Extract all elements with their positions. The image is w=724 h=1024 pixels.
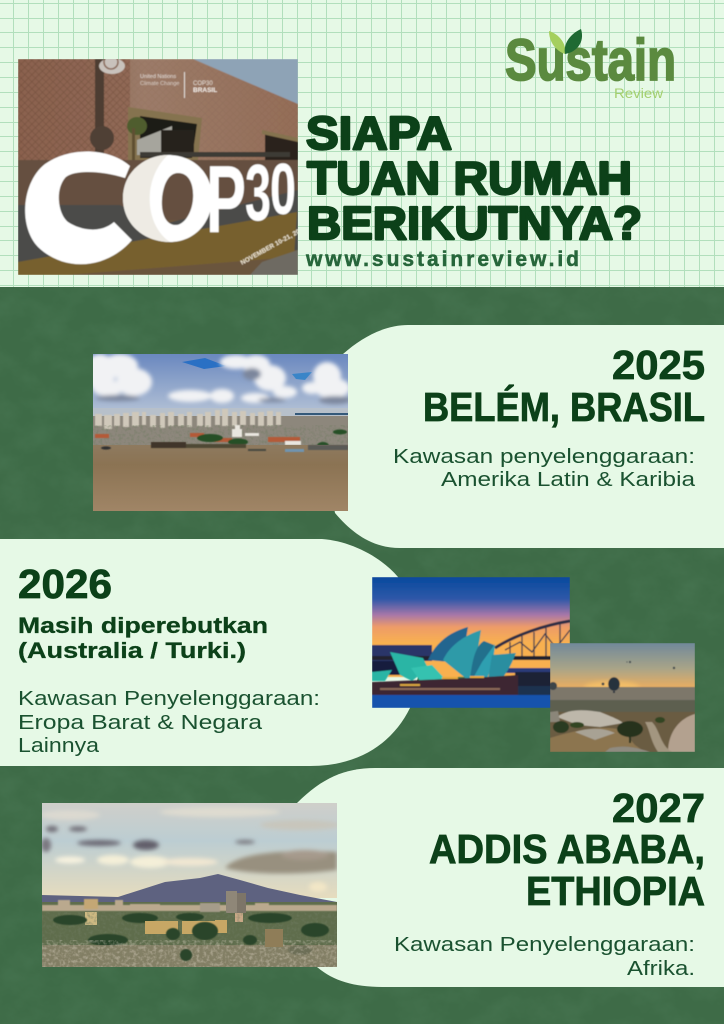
logo: Sustain Review: Review bbox=[614, 85, 664, 101]
text: 2026 region: Lainnya bbox=[18, 735, 100, 757]
photo: COP30 venue: United Nations bbox=[140, 74, 176, 80]
title: SIAPA bbox=[306, 107, 452, 159]
photo: Addis Ababa skyline bbox=[40, 803, 340, 967]
text: 2025 region: Amerika Latin & Karibia bbox=[441, 469, 696, 491]
panel: 2026 background bbox=[0, 539, 425, 766]
text: 2027 heading: ETHIOPIA bbox=[526, 868, 705, 914]
photo: Sydney Opera House bbox=[372, 577, 570, 708]
sculpture: P30: P bbox=[206, 146, 246, 253]
text: 2026 heading: 2026 bbox=[18, 561, 112, 607]
photo: COP30 venue: Climate Change bbox=[140, 81, 179, 87]
text: 2027 region: Kawasan Penyelenggaraan: bbox=[394, 934, 695, 956]
photo: COP30 venue: BRASIL bbox=[193, 87, 217, 94]
photo: COP30 venue: COP30 bbox=[193, 81, 213, 87]
title bbox=[306, 107, 642, 249]
logo: Sustain Review: Sustain bbox=[505, 28, 676, 93]
text: 2027 heading: ADDIS ABABA, bbox=[429, 826, 705, 872]
sculpture: P30 bbox=[209, 162, 295, 234]
sculpture: P30: 0 bbox=[270, 150, 296, 230]
text: 2027 heading: 2027 bbox=[612, 785, 705, 831]
text: 2025 region: Kawasan penyelenggaraan: bbox=[393, 446, 695, 468]
text: 2025 region bbox=[393, 446, 696, 491]
icon: logo leaves bbox=[549, 29, 582, 54]
title: BERIKUTNYA? bbox=[307, 197, 642, 249]
photo: COP30 venue: NOVEMBER 10-21, 2025 bbox=[240, 225, 308, 267]
text: 2026 region: Eropa Barat & Negara bbox=[18, 712, 263, 734]
sculpture: letter O bbox=[123, 155, 212, 242]
photo: COP30 venue bbox=[18, 55, 308, 275]
panel: 2027 background bbox=[270, 768, 724, 987]
photo: Cappadocia balloons bbox=[549, 643, 695, 752]
title: TUAN RUMAH bbox=[307, 152, 632, 204]
text: 2027 region: Afrika. bbox=[627, 958, 695, 980]
photo: Belem skyline bbox=[84, 354, 351, 511]
sculpture: P30: 3 bbox=[245, 148, 271, 237]
text: 2025 heading: 2025 bbox=[612, 342, 705, 388]
text: 2027 heading bbox=[429, 785, 705, 914]
website url: www.sustainreview.id bbox=[305, 248, 579, 271]
text: 2026 region: Kawasan Penyelenggaraan: bbox=[18, 688, 320, 710]
text: 2027 region bbox=[394, 934, 695, 980]
text: 2026 heading bbox=[18, 561, 268, 663]
text: 2026 region bbox=[18, 688, 320, 757]
panel: 2025 background bbox=[320, 325, 724, 548]
text: 2026 heading: (Australia / Turki.) bbox=[18, 638, 246, 663]
sculpture: letter C bbox=[25, 151, 132, 264]
text: 2026 heading: Masih diperebutkan bbox=[18, 613, 268, 638]
text: 2025 heading bbox=[423, 342, 705, 430]
